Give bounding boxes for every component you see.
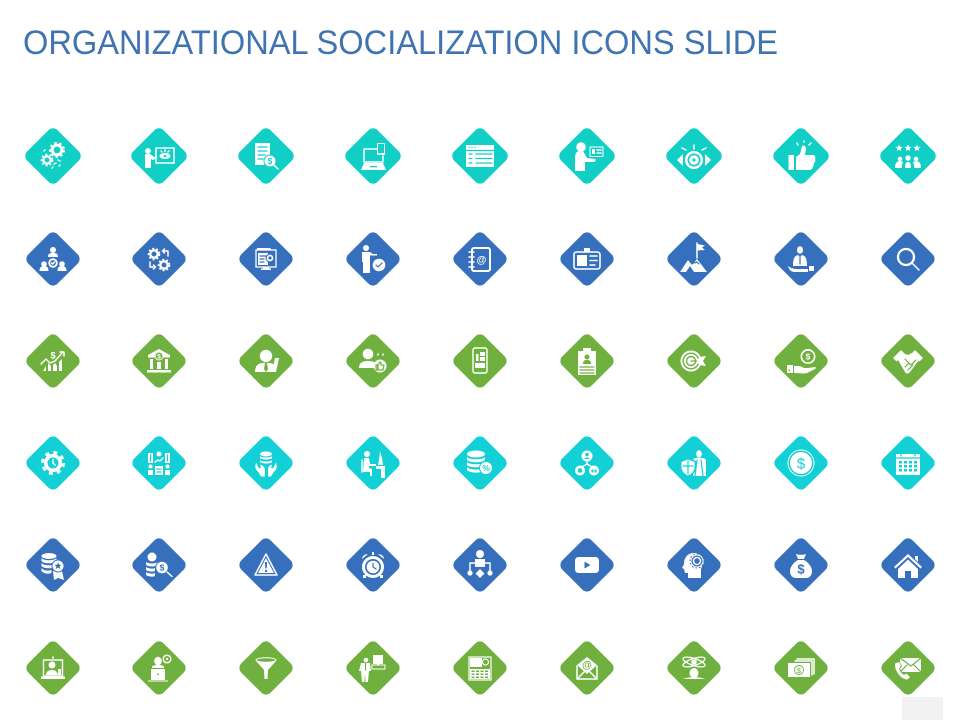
icon: gears with exchange arrows bbox=[130, 230, 188, 288]
row 6: green icons bbox=[24, 639, 937, 697]
icon: growth chart with dollar: $ bbox=[50, 350, 56, 362]
icon: person presenting card bbox=[557, 126, 617, 186]
icon: database with percent: % bbox=[482, 463, 490, 473]
icon: funnel bbox=[237, 639, 295, 697]
icon: gear with clock bbox=[24, 434, 82, 492]
icon: eye with rays bbox=[664, 126, 724, 186]
grey footer box bbox=[902, 697, 943, 720]
icon: bank building bbox=[130, 332, 188, 390]
icon: envelope with at sign: @ bbox=[582, 660, 592, 671]
icon: shield and businessman bbox=[665, 434, 723, 492]
icon: person with check badge bbox=[344, 230, 402, 288]
row 3: green icons bbox=[24, 332, 937, 390]
icon: browser window bbox=[450, 126, 510, 186]
icon: alarm clock bbox=[344, 536, 402, 594]
icon: stack of cash: $ bbox=[797, 666, 802, 675]
icon: smartphone with app bbox=[451, 332, 509, 390]
icon: address notebook bbox=[451, 230, 509, 288]
icon: ID badge bbox=[558, 230, 616, 288]
icon: money bag bbox=[772, 536, 830, 594]
icon: video play bbox=[558, 536, 616, 594]
icon: database with award ribbon bbox=[24, 536, 82, 594]
icon: document with dollar magnifier bbox=[236, 126, 296, 186]
icon: database with percent bbox=[451, 434, 509, 492]
icon: target with arrow bbox=[665, 332, 723, 390]
icon: three stars and team bbox=[878, 126, 938, 186]
icon: hand receiving coin bbox=[772, 332, 830, 390]
title: ORGANIZATIONAL SOCIALIZATION ICONS SLIDE bbox=[23, 24, 778, 62]
icon: monitor with document and gear bbox=[237, 230, 295, 288]
icon: team hierarchy with check bbox=[24, 230, 82, 288]
icon: phone and envelope bbox=[879, 639, 937, 697]
icon: person with thumbs up bbox=[344, 332, 402, 390]
icon: flag on mountain bbox=[665, 230, 723, 288]
icon: laptop with support agent bbox=[24, 639, 82, 697]
icon: document with dollar magnifier: $ bbox=[268, 157, 273, 166]
icon: address notebook: @ bbox=[477, 255, 487, 266]
icon: clipboard resume bbox=[558, 332, 616, 390]
icon: thumbs up bbox=[771, 126, 831, 186]
icon: office team and growth bbox=[130, 434, 188, 492]
icon: person with tie and ruler bbox=[237, 332, 295, 390]
icon: handshake bbox=[879, 332, 937, 390]
icon: warning triangle bbox=[237, 536, 295, 594]
icon: gears bbox=[23, 126, 83, 186]
icon: person and two gears network bbox=[558, 434, 616, 492]
icon: businessman with computer bbox=[344, 639, 402, 697]
icon: person database dollar magnifier: $ bbox=[160, 562, 165, 572]
icon: house bbox=[879, 536, 937, 594]
row 4: cyan icons bbox=[24, 434, 937, 492]
icon: person at desk bbox=[344, 434, 402, 492]
row 1: teal icons bbox=[23, 126, 938, 186]
row 5: blue icons bbox=[24, 536, 937, 594]
icon: head with gear bbox=[665, 536, 723, 594]
icon: database in hands bbox=[237, 434, 295, 492]
icon: head with orbiting atoms bbox=[665, 639, 723, 697]
row 2: blue icons bbox=[24, 230, 937, 288]
icon: envelope with at sign bbox=[558, 639, 616, 697]
icon: hand receiving coin: $ bbox=[806, 352, 811, 362]
icon: person database dollar magnifier bbox=[130, 536, 188, 594]
icon: money bag: $ bbox=[797, 562, 805, 576]
icon: calendar bbox=[879, 434, 937, 492]
icon: flow chart bbox=[451, 536, 509, 594]
icon: magnifier bbox=[879, 230, 937, 288]
icon: calculator bbox=[451, 639, 509, 697]
icon: dollar coin bbox=[772, 434, 830, 492]
icon: presenter with eye board bbox=[129, 126, 189, 186]
icon: laptop and phone bbox=[343, 126, 403, 186]
icon: bank building: $ bbox=[157, 354, 161, 360]
icon: dollar coin: $ bbox=[797, 456, 806, 472]
icon: growth chart with dollar bbox=[24, 332, 82, 390]
icon: person behind laptop with gear bbox=[130, 639, 188, 697]
icon: person on hand bbox=[772, 230, 830, 288]
icon: stack of cash bbox=[772, 639, 830, 697]
